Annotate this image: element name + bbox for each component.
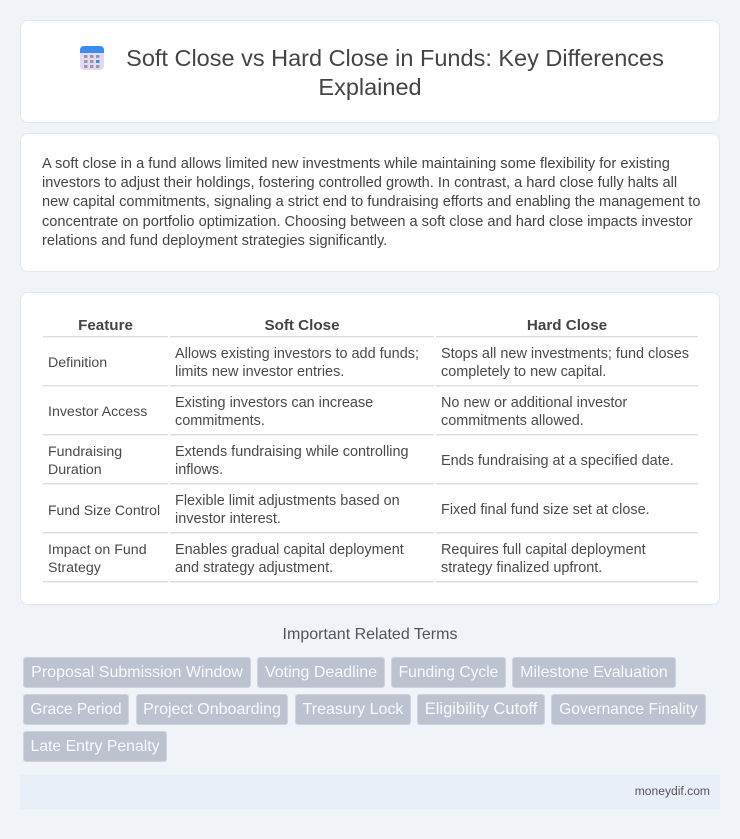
row: Impact on Fund Strategy: and strategy adjustment.	[175, 560, 333, 576]
related terms tags: Late Entry Penalty	[30, 738, 160, 755]
row: Definition: completely to new capital.	[441, 364, 606, 380]
header card	[20, 20, 720, 123]
row: Definition: limits new investor entries.	[175, 364, 344, 380]
footer bar	[20, 775, 720, 809]
row: Definition: Allows existing investors to add funds;	[175, 346, 419, 362]
row: Fundraising Duration: Extends fundraising while controlling	[175, 444, 409, 460]
row: Investor Access: commitments allowed.	[441, 413, 584, 429]
row: Fundraising Duration: Fundraising	[48, 444, 122, 460]
related terms tags: Proposal Submission Window	[31, 664, 243, 681]
table header: Soft Close	[264, 317, 340, 334]
intro paragraph card	[20, 133, 720, 272]
related terms tags: Project Onboarding	[143, 701, 281, 718]
table header: Hard Close	[527, 317, 607, 334]
row: Definition	[48, 346, 689, 380]
row: Fund Size Control: Fixed final fund size set at close.	[441, 502, 650, 518]
intro text: new capital commitments, signaling a strict end to fundraising efforts and enabling the management to	[42, 194, 700, 210]
row: Fund Size Control: investor interest.	[175, 511, 281, 527]
row: Fund Size Control: Fund Size Control	[48, 502, 160, 518]
row: Impact on Fund Strategy: Strategy	[48, 560, 101, 576]
row: Fund Size Control	[48, 493, 650, 527]
related terms tags: Eligibility Cutoff	[425, 700, 537, 718]
row: Fundraising Duration: inflows.	[175, 462, 223, 478]
comparison table card	[20, 292, 720, 605]
row: Investor Access: Existing investors can increase	[175, 395, 373, 411]
related terms tags: Grace Period	[30, 701, 122, 718]
table header: Feature	[78, 317, 133, 334]
intro text: investors to adjust their holdings, fostering controlled growth. In contrast, a hard close fully halts all	[42, 175, 677, 191]
intro text: relations and fund deployment strategies significantly.	[42, 233, 387, 249]
footer source: moneydif.com	[635, 784, 710, 798]
icon: calendar	[80, 46, 104, 70]
row: Impact on Fund Strategy: Requires full capital deployment	[441, 542, 646, 558]
row: Fundraising Duration: Duration	[48, 462, 102, 478]
intro text	[42, 156, 700, 249]
related terms tags: Treasury Lock	[303, 701, 403, 718]
row: Definition: Stops all new investments; fund closes	[441, 346, 689, 362]
row: Fundraising Duration: Ends fundraising at a specified date.	[441, 453, 674, 469]
row: Impact on Fund Strategy: strategy finalized upfront.	[441, 560, 602, 576]
comparison table	[43, 317, 698, 583]
intro text: concentrate on portfolio optimization. Choosing between a soft close and hard close impacts investor	[42, 214, 693, 230]
row: Fund Size Control: Flexible limit adjustments based on	[175, 493, 400, 509]
row: Definition: Definition	[48, 355, 107, 371]
row: Investor Access: commitments.	[175, 413, 265, 429]
table header	[78, 317, 607, 334]
related terms tags: Funding Cycle	[399, 664, 498, 681]
related terms heading: Important Related Terms	[283, 626, 457, 643]
related terms tags	[23, 657, 706, 762]
row: Investor Access: Investor Access	[48, 404, 147, 420]
related terms tags: Governance Finality	[559, 701, 698, 718]
related terms tags: Milestone Evaluation	[520, 664, 668, 681]
row: Investor Access: No new or additional investor	[441, 395, 627, 411]
related terms tags: Voting Deadline	[265, 664, 377, 681]
row: Impact on Fund Strategy	[48, 542, 646, 576]
title: Explained	[318, 74, 422, 100]
intro text: A soft close in a fund allows limited new investments while maintaining some flexibility for existing	[42, 156, 670, 172]
row: Impact on Fund Strategy: Enables gradual capital deployment	[175, 542, 404, 558]
title: Soft Close vs Hard Close in Funds: Key Differences	[126, 45, 664, 71]
row: Fundraising Duration	[48, 444, 674, 478]
row: Investor Access	[48, 395, 627, 429]
title	[126, 45, 664, 100]
row: Impact on Fund Strategy: Impact on Fund	[48, 542, 147, 558]
